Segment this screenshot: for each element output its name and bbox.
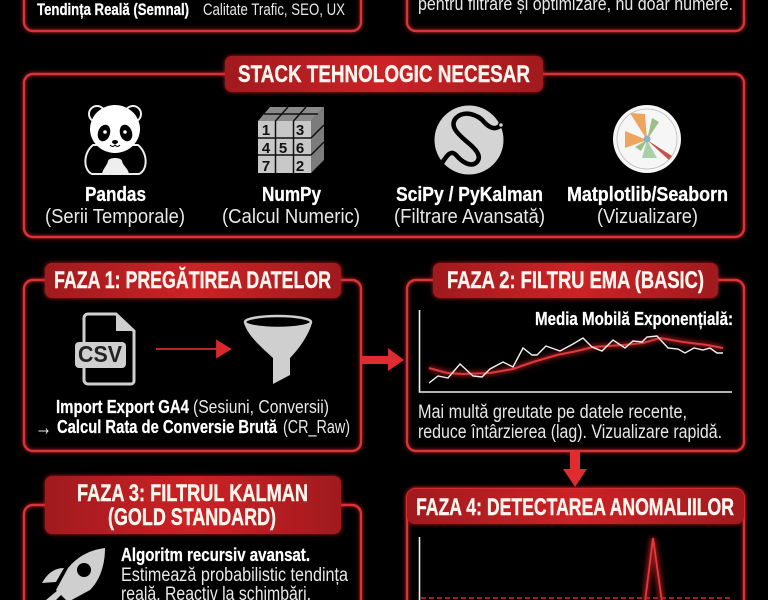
icon: numpy cube: 4 [262, 140, 271, 157]
text: real trend signal: Tendința Reală (Semnal) [37, 0, 189, 19]
text: phase 1 description: (Sesiuni, Conversii) [193, 397, 329, 417]
text: phase 3 description: Algoritm recursiv avansat. [121, 545, 310, 565]
panel: phase 1 [24, 263, 361, 451]
text: chart title: Media Mobilă Exponențială: [535, 309, 733, 329]
arrow: csv to funnel [156, 341, 230, 357]
icon: rocket [42, 548, 105, 600]
icon: csv file [75, 314, 134, 384]
icon: numpy cube: 7 [262, 158, 270, 175]
text: phase 2 description: Mai multă greutate pe datele recente, [418, 402, 687, 423]
text: phase 1 description: Import Export GA4 [56, 397, 189, 417]
icon: numpy cube: 6 [296, 140, 304, 157]
heading: stack: STACK TEHNOLOGIC NECESAR [238, 61, 530, 88]
icon: numpy cube: 5 [279, 140, 287, 157]
label: numpy: NumPy [262, 184, 322, 206]
icon: csv file: CSV [78, 341, 123, 367]
label: pandas: (Serii Temporale) [45, 206, 185, 228]
text: phase 3 description: Estimează probabilistic tendința [121, 565, 348, 586]
icon: numpy cube [258, 107, 324, 175]
text: phase 1 description: Calcul Rata de Conversie Brută [57, 417, 278, 437]
text: phase 1 description [35, 397, 350, 441]
arrow: phase 1 to phase 2 [361, 348, 404, 371]
panel: technology stack [24, 56, 744, 237]
label: scipy [394, 184, 545, 228]
panel: phase 3 [24, 476, 361, 600]
arrow: phase 2 to phase 4 [563, 451, 587, 487]
text: phase 1 description: (CR_Raw) [283, 417, 350, 438]
icon: funnel [244, 316, 312, 384]
label: pandas: Pandas [85, 184, 146, 206]
icon: panda [85, 105, 146, 174]
label: scipy: (Filtrare Avansată) [394, 206, 545, 228]
panel: phase 4 [407, 489, 744, 600]
chart: anomaly spike [420, 537, 733, 600]
heading: phase 1: FAZA 1: PREGĂTIREA DATELOR [54, 266, 331, 294]
heading: stack [225, 56, 543, 92]
text: phase 1 description: → [35, 414, 52, 441]
label: numpy [222, 184, 360, 228]
label: matplotlib: (Vizualizare) [597, 206, 698, 228]
text: phase 2 description [418, 402, 722, 443]
label: numpy: (Calcul Numeric) [222, 206, 360, 228]
icon: matplotlib [613, 105, 681, 173]
icon: numpy cube: 3 [296, 122, 304, 139]
icon: numpy cube: 1 [262, 122, 270, 139]
label: matplotlib [567, 184, 728, 228]
icon: numpy cube: 2 [296, 158, 304, 175]
chart: EMA line chart [420, 309, 733, 392]
text: phase 3 description [121, 545, 348, 600]
heading: phase 2 [433, 263, 718, 298]
text: traffic quality: Calitate Trafic, SEO, UX [203, 0, 345, 19]
panel: top-left signal summary [24, 0, 361, 31]
heading: phase 1 [45, 263, 341, 298]
label: matplotlib: Matplotlib/Seaborn [567, 184, 728, 206]
label: pandas [45, 184, 185, 228]
label: scipy: SciPy / PyKalman [396, 184, 543, 206]
panel: phase 2 [407, 263, 744, 451]
panel: top-right note [407, 0, 744, 31]
heading: phase 3 [45, 476, 341, 534]
heading: phase 3: FAZA 3: FILTRUL KALMAN [77, 480, 308, 507]
icon: scipy [434, 106, 504, 174]
heading: phase 3: (GOLD STANDARD) [108, 504, 276, 531]
